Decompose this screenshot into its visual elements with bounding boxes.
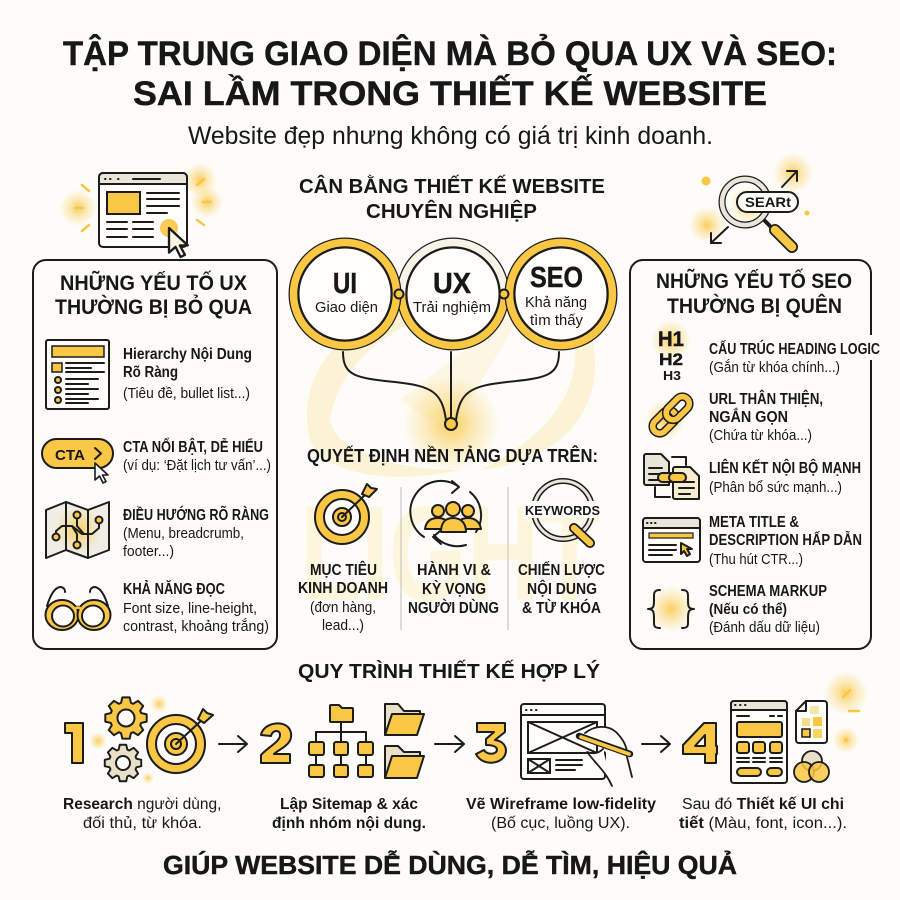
panel heading: UX — [55, 271, 252, 319]
step 1 — [63, 695, 221, 832]
text: step 2 — [272, 796, 426, 832]
text: meta title: META TITLE & — [709, 514, 799, 531]
text: navigation: (Menu, breadcrumb, — [123, 525, 244, 542]
text: content strategy: NỘI DUNG — [527, 579, 597, 598]
icon: heading levels: H2 — [659, 350, 683, 369]
icon: sitemap and folders — [309, 704, 424, 778]
icon: UI design — [731, 671, 868, 783]
text: step 4 — [679, 796, 847, 832]
ring: UX — [402, 242, 504, 346]
icon: navigation map — [46, 502, 109, 558]
text: schema: (Đánh dấu dữ liệu) — [709, 619, 820, 636]
ring: UI: Giao diện — [315, 299, 378, 316]
icon: search magnifier: SEARt — [745, 194, 791, 210]
icon: keywords magnifier: KEYWORDS — [525, 503, 600, 518]
text: step 3: (Bố cục, luồng UX). — [491, 815, 630, 832]
icon: browser with cursor — [60, 163, 223, 257]
text: hierarchy: Rõ Ràng — [123, 364, 178, 381]
ring: UI: UI — [333, 268, 357, 300]
number 2 — [261, 723, 291, 763]
panel: UX factors — [33, 260, 277, 649]
connectors — [343, 352, 559, 430]
icon: wireframe and hand — [521, 704, 632, 786]
number 4 — [683, 723, 717, 763]
text: readability: contrast, khoảng trắng) — [123, 618, 269, 635]
icon: search magnifier — [689, 153, 813, 247]
ring: UI — [294, 242, 396, 346]
text: user behavior: HÀNH VI & — [417, 560, 491, 579]
icon: CTA button: CTA — [55, 447, 85, 464]
number 1 — [65, 723, 83, 763]
icon: gears and target — [89, 695, 213, 784]
subtitle: Website đẹp nhưng không có giá trị kinh doanh. — [188, 122, 713, 150]
text: readability: KHẢ NĂNG ĐỌC — [123, 581, 225, 598]
icon: heading levels: H3 — [663, 369, 681, 383]
text: navigation: footer...) — [123, 543, 174, 560]
footer slogan: GIÚP WEBSITE DỄ DÙNG, DỄ TÌM, HIỆU QUẢ — [163, 850, 737, 880]
arrow 2 — [435, 736, 464, 752]
text: step 4: tiết (Màu, font, icon...). — [679, 815, 847, 832]
text: heading structure: (Gắn từ khóa chính...) — [709, 359, 840, 376]
number 3 — [476, 723, 506, 763]
text: meta title: (Thu hút CTR...) — [709, 551, 803, 568]
text: step 1: Research người dùng, — [63, 796, 221, 813]
step 3 — [466, 704, 656, 832]
diagram: UI UX SEO rings — [294, 242, 612, 472]
panel heading: SEO — [656, 269, 852, 318]
text: internal links: (Phân bổ sức mạnh...) — [709, 479, 842, 496]
center heading — [299, 174, 605, 223]
text: step 2: định nhóm nội dung. — [272, 815, 426, 832]
icon: linked documents — [644, 454, 699, 499]
icon: business target — [315, 484, 377, 544]
text: content strategy: & TỪ KHÓA — [522, 598, 601, 617]
icon: heading levels: H1 — [658, 328, 684, 351]
text: content strategy: CHIẾN LƯỢC — [518, 560, 605, 579]
ring: SEO — [510, 242, 612, 346]
step 2 — [261, 704, 426, 832]
text: meta title — [709, 514, 862, 568]
text: schema: SCHEMA MARKUP — [709, 583, 827, 600]
icon: CTA button — [42, 439, 113, 483]
text: friendly URL — [709, 390, 823, 444]
text: hierarchy — [123, 346, 252, 402]
text: user behavior — [408, 560, 499, 617]
ring: SEO: tìm thấy — [530, 312, 583, 329]
text: friendly URL: NGẮN GỌN — [709, 408, 788, 426]
ring: SEO: Khả năng — [525, 294, 587, 311]
icon: meta snippet — [643, 518, 700, 562]
text: business goals: MỤC TIÊU — [310, 560, 377, 579]
text: hierarchy: Hierarchy Nội Dung — [123, 346, 252, 363]
arrow 1 — [219, 736, 247, 752]
title — [63, 35, 837, 113]
icon: content hierarchy — [46, 340, 109, 409]
panel heading: UX: NHỮNG YẾU TỐ UX — [60, 271, 247, 295]
text: user behavior: KỲ VỌNG — [422, 579, 486, 598]
text: internal links — [709, 459, 861, 496]
text: navigation — [123, 506, 269, 560]
text: meta title: DESCRIPTION HẤP DẪN — [709, 532, 862, 549]
text: navigation: ĐIỀU HƯỚNG RÕ RÀNG — [123, 506, 269, 524]
arrow 3 — [642, 736, 670, 752]
text: step 1 — [63, 796, 221, 832]
text: heading structure — [709, 335, 880, 376]
icon: heading levels — [651, 320, 691, 383]
icon: chain link — [645, 394, 692, 440]
text: business goals — [298, 560, 388, 634]
text: step 3: Vẽ Wireframe low-fidelity — [466, 796, 656, 813]
text: CTA: (ví dụ: ‘Đặt lịch tư vấn’...) — [123, 457, 271, 474]
text: CTA — [123, 438, 271, 474]
ring: UX: UX — [433, 268, 472, 300]
text: business goals: KINH DOANH — [298, 580, 388, 597]
icon: keywords magnifier — [523, 481, 601, 543]
text: hierarchy: (Tiêu đề, bullet list...) — [123, 385, 250, 402]
text: friendly URL: (Chứa từ khóa...) — [709, 427, 812, 444]
center heading: CÂN BẰNG THIẾT KẾ WEBSITE — [299, 174, 605, 198]
text: readability: Font size, line-height, — [123, 600, 257, 617]
text: step 4: Sau đó Thiết kế UI chi — [682, 796, 844, 813]
panel heading: SEO: NHỮNG YẾU TỐ SEO — [656, 269, 852, 293]
text: friendly URL: URL THÂN THIỆN, — [709, 390, 823, 408]
watermark: LIGHT — [300, 478, 600, 629]
text: content strategy — [518, 560, 605, 617]
text: user behavior: NGƯỜI DÙNG — [408, 598, 499, 617]
text: internal links: LIÊN KẾT NỘI BỘ MẠNH — [709, 459, 861, 477]
text: CTA: CTA NỔI BẬT, DỄ HIỂU — [123, 438, 263, 456]
title: TẬP TRUNG GIAO DIỆN MÀ BỎ QUA UX VÀ SEO: — [63, 35, 837, 73]
ring: UX: Trải nghiệm — [413, 299, 491, 316]
text: readability — [123, 581, 269, 635]
center heading: CHUYÊN NGHIỆP — [366, 199, 537, 223]
subheading: decisions: QUYẾT ĐỊNH NỀN TẢNG DỰA TRÊN: — [307, 445, 598, 466]
text: schema: (Nếu có thể) — [709, 601, 787, 618]
panel: SEO factors — [630, 260, 880, 649]
title: SAI LẦM TRONG THIẾT KẾ WEBSITE — [133, 75, 767, 113]
watermark — [300, 299, 600, 629]
text: business goals: (đơn hàng, — [310, 599, 376, 616]
text: business goals: lead...) — [322, 617, 364, 634]
step 4 — [679, 671, 868, 832]
text: step 1: đối thủ, từ khóa. — [83, 815, 202, 832]
text: schema — [709, 583, 827, 636]
panel heading: UX: THƯỜNG BỊ BỎ QUA — [55, 295, 252, 319]
panel heading: SEO: THƯỜNG BỊ QUÊN — [667, 294, 842, 318]
text: step 2: Lập Sitemap & xác — [280, 796, 418, 813]
icon: schema braces — [648, 586, 694, 632]
icon: glasses — [46, 587, 110, 630]
icon: user behavior — [410, 481, 481, 546]
text: step 3 — [466, 796, 656, 832]
process heading: QUY TRÌNH THIẾT KẾ HỢP LÝ — [298, 659, 601, 683]
ring: SEO: SEO — [530, 262, 583, 294]
